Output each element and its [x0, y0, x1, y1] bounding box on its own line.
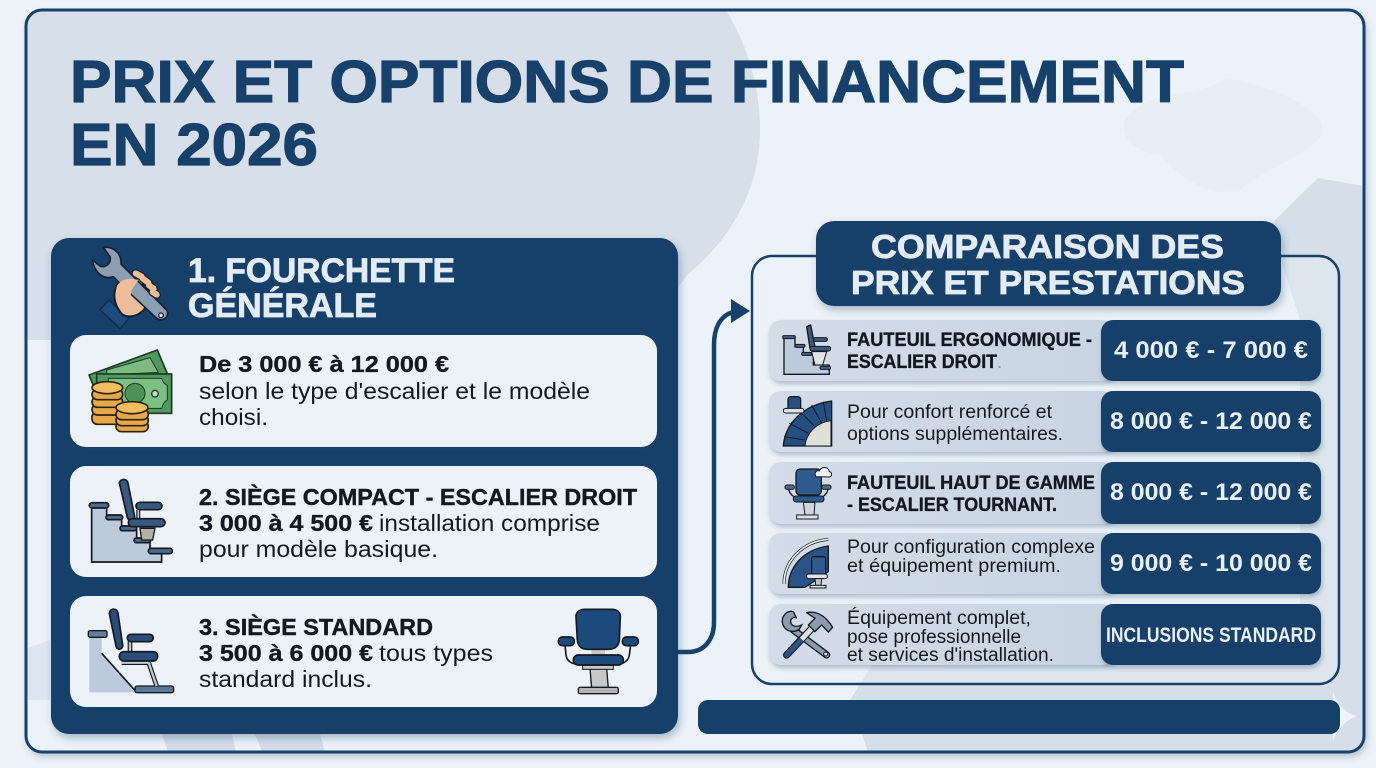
icon: hand holding wrench: [92, 247, 168, 329]
price: 8 000 - 12 000 premium: 8 000 € - 12 000 €: [1110, 479, 1312, 506]
card text: installation comprise: [379, 510, 600, 536]
row text: [847, 402, 1063, 445]
row: ergonomic straight stairs: [769, 320, 1114, 381]
row text: Équipement complet,: [847, 608, 1031, 629]
price: 4 000 - 7 000: 4 000 € - 7 000 €: [1114, 337, 1308, 364]
title: [70, 49, 1184, 178]
card: compact seat: [70, 466, 657, 577]
card text: choisi.: [199, 404, 268, 430]
label: standard inclusions: INCLUSIONS STANDARD: [1106, 624, 1316, 647]
row text: Pour confort renforcé et: [847, 402, 1053, 423]
price: 9 000 - 10 000: 9 000 € - 10 000 €: [1110, 550, 1312, 577]
title: PRIX ET OPTIONS DE FINANCEMENT: [70, 49, 1184, 115]
card text: tous types: [379, 640, 493, 666]
icon: stairlift: [783, 325, 831, 374]
card text: [199, 351, 590, 430]
card text: [199, 613, 493, 692]
price: 8 000 - 12 000: [1101, 391, 1321, 452]
heading: comparison: [816, 221, 1281, 306]
arrow: connector to comparison panel: [678, 299, 750, 652]
heading: comparison: COMPARAISON DES: [871, 228, 1224, 265]
icon: curved rail with seat: [784, 539, 828, 588]
row text: FAUTEUIL ERGONOMIQUE -: [847, 330, 1092, 351]
card text: 3 000 à 4 500 €: [199, 510, 373, 536]
icon: stairlift on straight stairs: [89, 479, 172, 562]
icon: wrench and hammer: [782, 611, 833, 656]
bottom bar with arrow tip: [698, 692, 1357, 741]
card text: 2. SIÈGE COMPACT - ESCALIER DROIT: [199, 483, 637, 510]
row text: [847, 608, 1054, 666]
row: high-end turning stairs: [769, 462, 1114, 524]
row text: ESCALIER DROIT: [847, 352, 997, 373]
icon: curved stairs with seat: [783, 397, 832, 446]
panel: comparison: [752, 221, 1339, 684]
icon: chair: [558, 609, 638, 694]
panel heading: GÉNÉRALE: [188, 287, 377, 325]
card text: 3. SIÈGE STANDARD: [199, 613, 433, 640]
row text: et services d'installation.: [847, 645, 1054, 666]
card text: De 3 000 € à 12 000 €: [199, 351, 449, 377]
row text: et équipement premium.: [847, 556, 1061, 577]
card text: 3 500 à 6 000 €: [199, 640, 373, 666]
label: standard inclusions: [1101, 604, 1321, 665]
row: standard inclusions: [769, 604, 1114, 666]
icon: banknotes and coins: [89, 350, 172, 432]
row text: options supplémentaires.: [847, 424, 1063, 445]
panel heading: [188, 252, 455, 325]
icon: stairlift on ramp: [88, 609, 174, 693]
row text: - ESCALIER TOURNANT.: [847, 495, 1057, 516]
price: 8 000 - 12 000 premium: [1101, 462, 1321, 524]
card: standard seat: [70, 596, 657, 707]
card text: pour modèle basique.: [199, 536, 438, 562]
row: comfort options: [769, 391, 1114, 452]
row text: .: [997, 352, 1002, 373]
card text: selon le type d'escalier et le modèle: [199, 378, 590, 404]
icon: premium chair with cloud: [785, 467, 832, 519]
title: EN 2026: [70, 112, 318, 178]
card text: [199, 483, 637, 562]
price: 4 000 - 7 000: [1101, 320, 1321, 381]
price: 8 000 - 12 000: 8 000 € - 12 000 €: [1110, 408, 1312, 435]
row text: [847, 537, 1095, 577]
row text: [847, 473, 1095, 516]
row text: FAUTEUIL HAUT DE GAMME: [847, 473, 1095, 494]
price: 9 000 - 10 000: [1101, 533, 1321, 594]
heading: comparison: PRIX ET PRESTATIONS: [851, 264, 1245, 301]
panel: fourchette générale: [51, 238, 678, 734]
card: price range: [70, 335, 657, 447]
card text: standard inclus.: [199, 666, 372, 692]
row text: [847, 330, 1092, 373]
row text: pose professionnelle: [847, 627, 1021, 648]
row: complex configuration: [769, 533, 1114, 594]
panel heading: 1. FOURCHETTE: [188, 252, 455, 290]
row text: Pour configuration complexe: [847, 537, 1095, 558]
